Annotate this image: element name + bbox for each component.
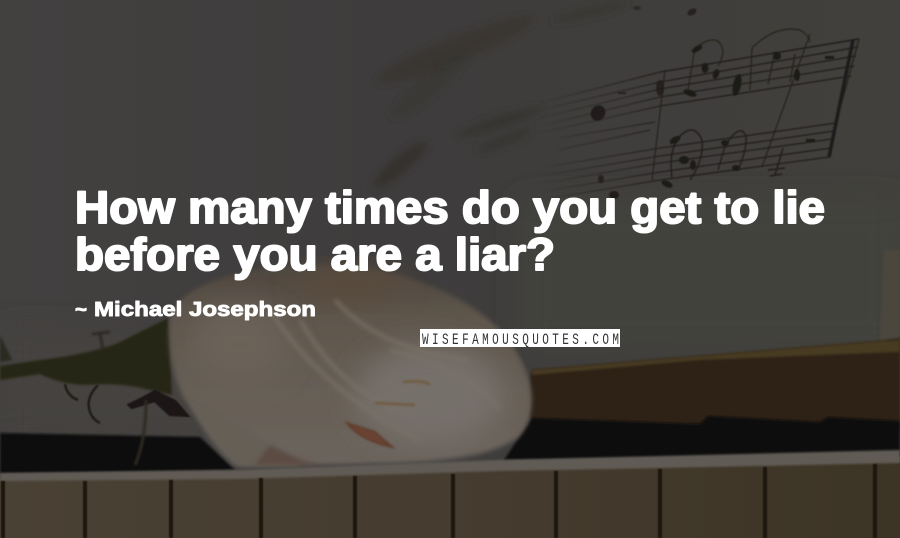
piano fallboard [530, 338, 900, 430]
watermark: WISEFAMOUSQUOTES.COM [422, 332, 619, 350]
music stems and bar lines [652, 29, 859, 180]
rose stem and leaves [0, 318, 186, 465]
music stave: top [540, 39, 859, 133]
quote text: before you are a liar? [75, 229, 555, 280]
quote text: How many times do you get to lie [75, 182, 825, 233]
quote text [75, 182, 825, 280]
rose [170, 265, 532, 466]
piano white keys [0, 450, 900, 538]
author attribution: ~ [75, 298, 87, 321]
music slurs [671, 130, 785, 180]
author attribution: Michael Josephson [94, 298, 316, 321]
black keys [0, 416, 900, 474]
blurred music notation [368, 0, 630, 194]
music notes [588, 6, 834, 199]
music stave: bottom [540, 122, 836, 200]
